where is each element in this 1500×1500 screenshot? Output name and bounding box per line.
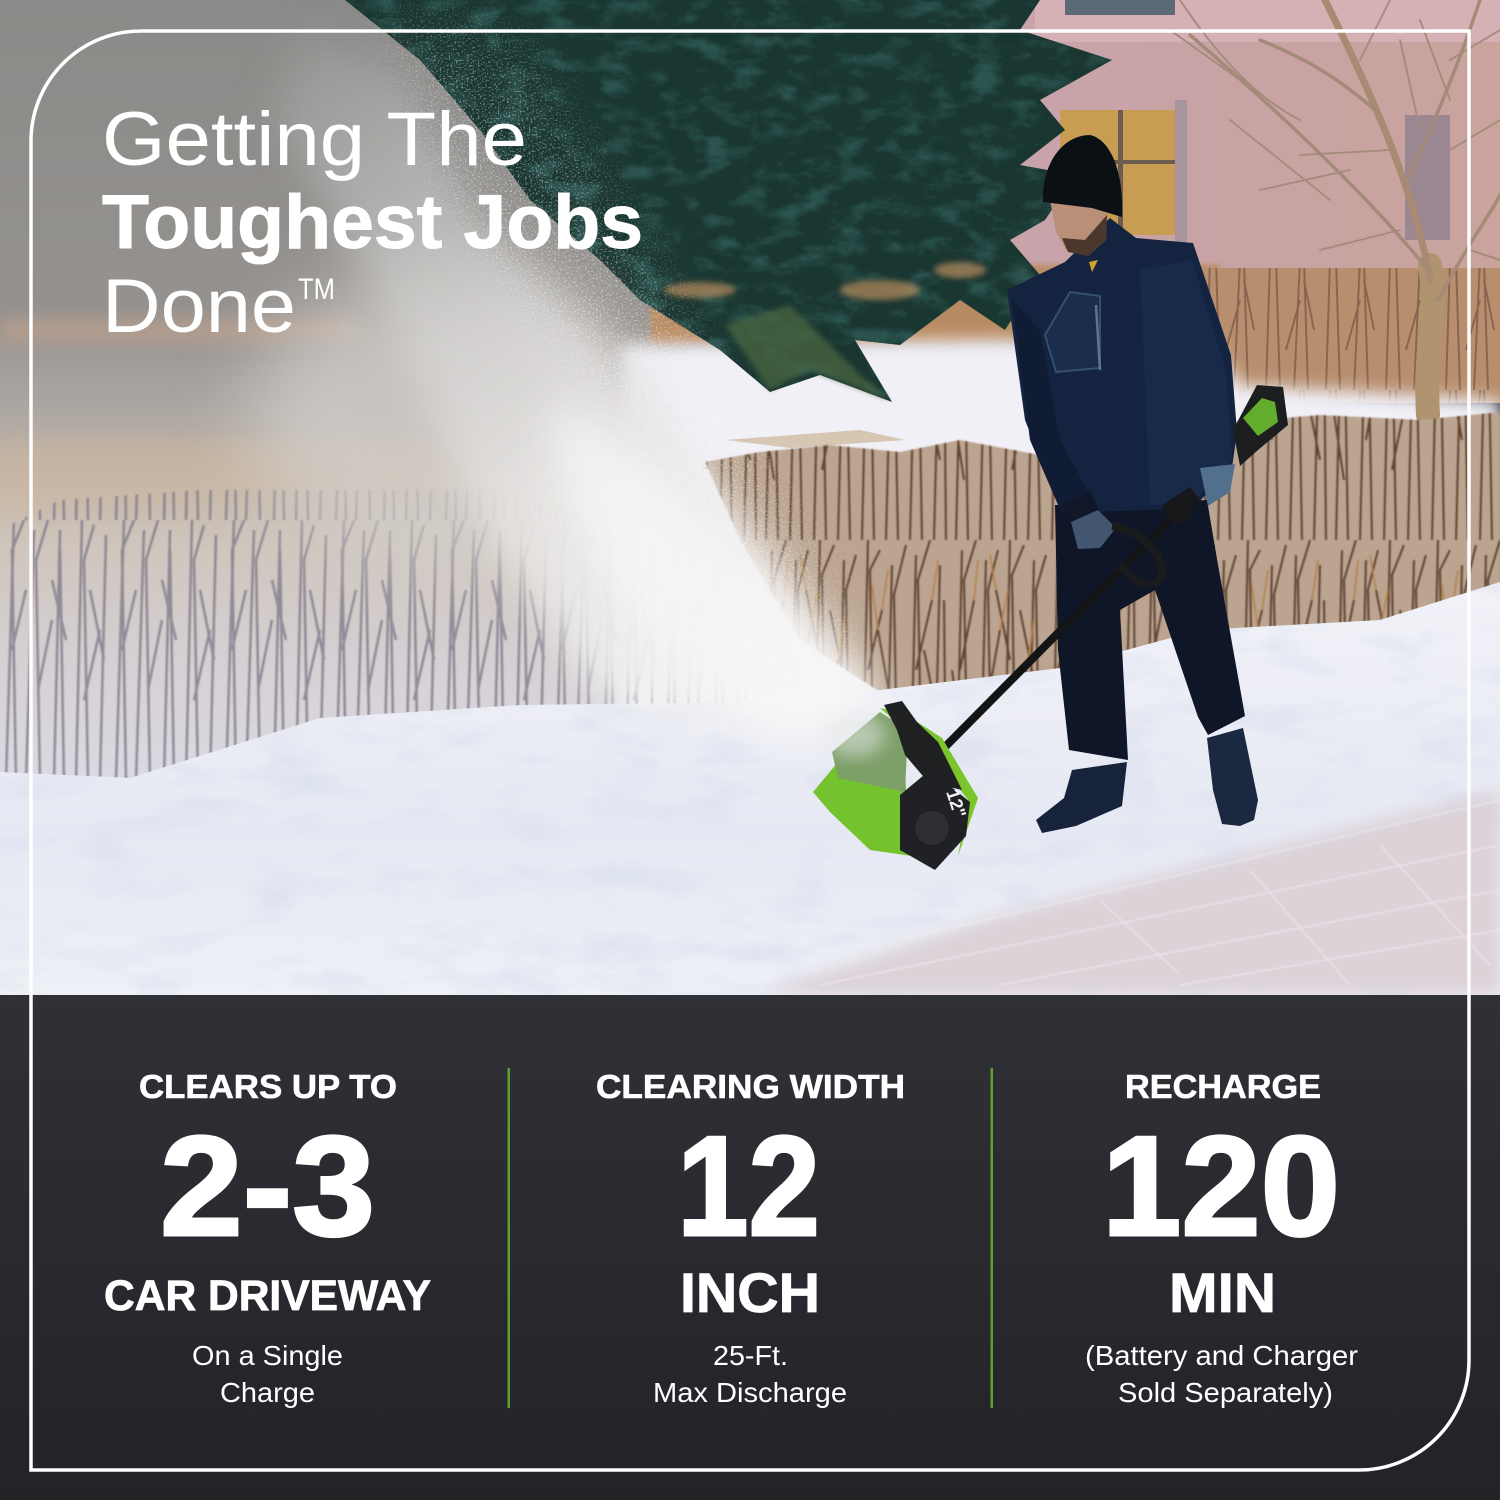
plume: wide haze — [250, 270, 630, 570]
shovel: battery — [1233, 385, 1288, 466]
background: sunlit band behind tree — [650, 265, 1220, 345]
shovel: green auger — [813, 762, 912, 856]
stat: clearing width: 12 — [677, 1107, 820, 1266]
man: jacket — [1007, 218, 1237, 512]
shovel: shaft — [942, 518, 1172, 750]
background: peach sunlit bands — [0, 318, 500, 510]
stat: driveway coverage: CLEARS UP TO — [139, 1068, 397, 1105]
bottom dark stats panel — [0, 995, 1500, 1500]
evergreen tree — [345, 0, 1112, 402]
plume: speckled droplets — [380, 0, 880, 680]
man: right glove — [1200, 464, 1235, 506]
man: trousers — [1055, 500, 1245, 760]
title: TM — [298, 273, 335, 306]
shovel: green rim — [880, 708, 978, 856]
plume: dense lower core — [556, 400, 860, 735]
stat: clearing width: CLEARING WIDTH — [596, 1068, 905, 1105]
shovel: snow mist — [825, 713, 885, 757]
background: pink building — [1000, 0, 1500, 300]
background: bare tree — [1170, 0, 1500, 415]
shovel: wheel hub — [915, 811, 949, 845]
snow shovel — [813, 385, 1288, 870]
tree: sunlit gaps — [664, 262, 986, 300]
snow spray plume — [250, 0, 885, 740]
shovel: upper black housing — [884, 701, 962, 790]
stat: recharge time: (Battery and Charger — [1085, 1340, 1358, 1371]
snow ground — [0, 582, 1500, 1000]
title: Toughest Jobs — [102, 180, 643, 265]
stat: recharge time — [1085, 1068, 1358, 1408]
pocket: zipper — [1096, 305, 1100, 370]
background: far orange hedge — [1205, 268, 1500, 403]
divider right — [990, 1068, 993, 1408]
man: left cuff — [1062, 490, 1100, 525]
stat: driveway coverage — [104, 1068, 431, 1408]
man: sleeve crease — [1012, 300, 1098, 514]
stat: driveway coverage: On a Single — [192, 1340, 343, 1371]
man: beard — [1062, 215, 1107, 256]
shovel: battery green — [1243, 398, 1278, 436]
tree: warm lower branches — [725, 305, 890, 400]
man: chest pocket — [1045, 292, 1100, 372]
stat: recharge time: 120 — [1102, 1107, 1340, 1266]
stat: driveway coverage: Charge — [220, 1377, 315, 1408]
stat: recharge time: RECHARGE — [1125, 1068, 1321, 1105]
title: Done — [102, 264, 296, 349]
title — [102, 97, 643, 349]
stat: clearing width: Max Discharge — [653, 1377, 847, 1408]
man — [1007, 135, 1258, 833]
stat: recharge time: MIN — [1169, 1261, 1276, 1324]
title: Getting The — [102, 97, 527, 182]
scene photo: man clearing snow — [0, 0, 1500, 1000]
man: beanie — [1043, 135, 1122, 217]
man: collar zip tab — [1089, 260, 1098, 272]
background: mid snow field — [620, 340, 1500, 720]
man: far boot — [1207, 728, 1258, 826]
man: face — [1050, 200, 1107, 256]
walkway: brick joints — [820, 800, 1500, 985]
shovel: side plate — [900, 770, 970, 870]
stat: recharge time: Sold Separately) — [1118, 1377, 1333, 1408]
man: left glove — [1071, 510, 1116, 549]
man: near boot — [1036, 762, 1127, 833]
stat: driveway coverage: CAR DRIVEWAY — [104, 1272, 431, 1320]
man: jacket shading — [1140, 260, 1232, 505]
brick walkway — [770, 790, 1500, 995]
shovel: upper grip — [1162, 487, 1200, 524]
shovel: loop handle — [1112, 526, 1162, 584]
left grey bushes — [0, 490, 760, 780]
background: left hazy ground — [0, 0, 1100, 800]
stat: clearing width: INCH — [680, 1261, 820, 1324]
stat: clearing width: 25-Ft. — [713, 1340, 788, 1371]
background: snow shadow streaks — [700, 430, 905, 476]
divider left — [508, 1068, 510, 1408]
shovel: misted housing — [832, 712, 908, 792]
stat: driveway coverage: 2-3 — [160, 1107, 375, 1266]
right brown bushes — [705, 412, 1500, 692]
shovel: size label: 12" — [942, 787, 970, 820]
stat: clearing width — [596, 1068, 905, 1408]
